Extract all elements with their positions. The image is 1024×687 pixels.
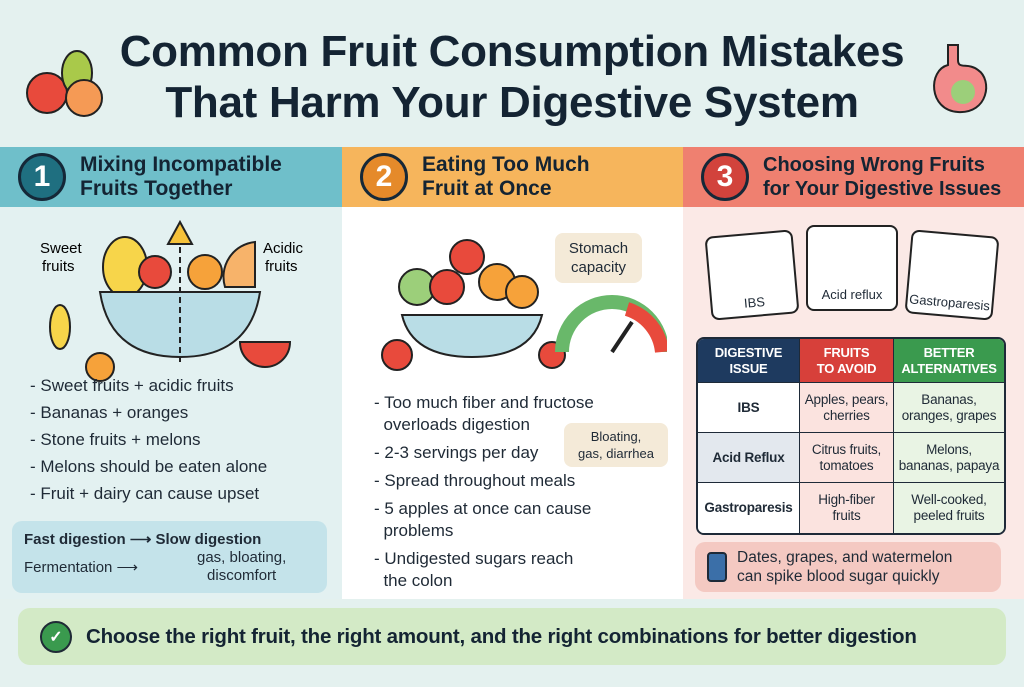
callout: blood sugar: can spike blood sugar quickly (737, 568, 939, 585)
table: FRUITS (824, 344, 869, 360)
bottom banner (18, 608, 1006, 665)
header 2 (342, 147, 683, 207)
table (696, 337, 1006, 535)
illustration: fruit bowl: fruits (265, 258, 298, 275)
list 1: - Fruit + dairy can cause upset (30, 484, 259, 503)
list 2: - 2-3 servings per day (374, 443, 538, 462)
table: BETTER (924, 344, 974, 360)
title (120, 27, 904, 127)
table: Bananas, (921, 392, 977, 406)
table: Apples, pears, (805, 392, 888, 406)
panel 1 (0, 147, 342, 599)
table: oranges, grapes (902, 408, 996, 422)
list 2: problems (383, 521, 453, 540)
table: Well-cooked, (911, 492, 987, 507)
list 2: - Too much fiber and fructose (374, 393, 594, 412)
illustration: fruit bowl: Acidic (263, 240, 304, 257)
list 2: overloads digestion (383, 415, 530, 434)
icon: glucose meter (707, 552, 727, 582)
table: TO AVOID (817, 360, 876, 376)
header 3: for Your Digestive Issues (763, 178, 1001, 200)
icon: fruits top left (26, 50, 103, 117)
header 1 (0, 147, 342, 207)
cards: IBS, acid reflux, gastroparesis: Acid reflux (822, 287, 882, 302)
illustration: fruit bowl: Sweet (40, 240, 83, 257)
title: Common Fruit Consumption Mistakes (120, 27, 904, 76)
callout: digestion (12, 521, 327, 593)
callout: bloating (564, 423, 668, 467)
header 2: Fruit at Once (422, 177, 552, 200)
table: IBS (738, 400, 759, 414)
table: bananas, papaya (899, 458, 999, 472)
cards: IBS, acid reflux, gastroparesis: IBS (743, 294, 765, 311)
table: ISSUE (729, 360, 768, 376)
callout: bloating: Bloating, (591, 429, 641, 444)
table: Citrus fruits, (812, 442, 881, 456)
table: DIGESTIVE (715, 344, 782, 360)
illustration: fruit bowl: fruits (42, 258, 75, 275)
callout: blood sugar (695, 542, 1001, 592)
callout: digestion: gas, bloating, (197, 549, 286, 566)
header 1: Fruits Together (80, 177, 232, 200)
callout: digestion: Fast digestion ⟶ Slow digestion (24, 531, 261, 548)
callout: stomach capacity (555, 233, 642, 283)
callout: bloating: gas, diarrhea (578, 446, 654, 461)
header 1: Mixing Incompatible (80, 153, 282, 176)
table: Gastroparesis (704, 500, 793, 515)
table: tomatoes (820, 458, 873, 472)
callout: stomach capacity: capacity (571, 259, 626, 276)
list 1: - Sweet fruits + acidic fruits (30, 376, 234, 395)
panel 3 (683, 147, 1024, 599)
cards: IBS, acid reflux, gastroparesis: Gastroparesis (909, 291, 991, 313)
list 1 (30, 376, 267, 503)
icon: stomach top right (933, 44, 988, 114)
list 1: - Stone fruits + melons (30, 430, 201, 449)
title: That Harm Your Digestive System (165, 78, 859, 127)
list 1: - Bananas + oranges (30, 403, 188, 422)
table: ALTERNATIVES (901, 360, 997, 376)
table: Acid Reflux (712, 450, 785, 464)
table: fruits (832, 508, 861, 523)
list 2: the colon (383, 571, 452, 590)
banner text: Choose the right fruit, the right amount, and the right combinations for better digestion (86, 624, 917, 648)
list 1: - Melons should be eaten alone (30, 457, 267, 476)
header 2: Eating Too Much (422, 153, 590, 176)
callout: digestion: Fermentation ⟶ (24, 559, 138, 576)
cards: IBS, acid reflux, gastroparesis (705, 225, 999, 320)
callout: blood sugar: Dates, grapes, and watermelon (737, 549, 952, 566)
callout: digestion: discomfort (207, 567, 276, 584)
header 1: 1 (34, 160, 50, 193)
list 2 (374, 393, 594, 590)
list 2: - Spread throughout meals (374, 471, 575, 490)
table: peeled fruits (914, 508, 984, 523)
icon: check (40, 620, 72, 652)
header 3 (683, 147, 1024, 207)
header 3: 3 (717, 160, 733, 193)
table: cherries (823, 408, 870, 422)
header 3: Choosing Wrong Fruits (763, 154, 985, 176)
icon: check: ✓ (49, 628, 63, 646)
list 2: - 5 apples at once can cause (374, 499, 591, 518)
list 2: - Undigested sugars reach (374, 549, 573, 568)
illustration: fruit bowl (40, 220, 304, 382)
illustration: bowl and gauge (381, 239, 667, 371)
table: Melons, (926, 442, 972, 456)
header 2: 2 (376, 160, 392, 193)
table: High-fiber (818, 492, 875, 507)
panel 2 (342, 147, 683, 599)
callout: stomach capacity: Stomach (569, 240, 628, 257)
